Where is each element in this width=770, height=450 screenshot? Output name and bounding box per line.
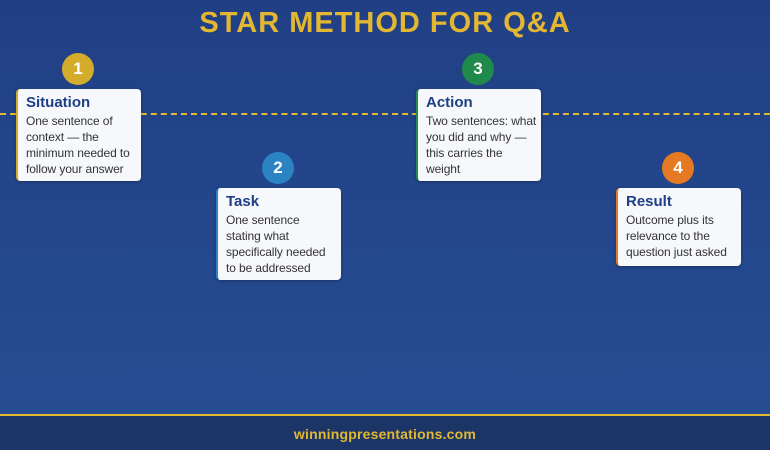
card: task <box>216 188 341 280</box>
card: action <box>416 89 541 181</box>
card: situation: Situation <box>26 94 90 111</box>
icon: step 4 circle <box>662 152 694 184</box>
card: action: Action <box>426 94 473 111</box>
icon: step 3 circle <box>462 53 494 85</box>
card: result <box>616 188 741 266</box>
icon: step 3 circle: 3 <box>473 59 483 78</box>
footer: winningpresentations.com <box>294 426 476 442</box>
card: action: Two sentences: what you did and why — this carries the weight <box>426 114 536 176</box>
icon: step 1 circle: 1 <box>73 59 83 78</box>
card: task: One sentence stating what specifically needed to be addressed <box>226 213 326 275</box>
icon: step 2 circle <box>262 152 294 184</box>
card: result: Outcome plus its relevance to the question just asked <box>626 213 727 259</box>
icon: step 1 circle <box>62 53 94 85</box>
icon: step 2 circle: 2 <box>273 158 283 177</box>
footer <box>0 414 770 450</box>
timeline dashed line <box>0 113 770 115</box>
card: situation <box>16 89 141 181</box>
title: STAR METHOD FOR Q&A <box>199 7 571 39</box>
card: situation: One sentence of context — the minimum needed to follow your answer <box>26 114 130 176</box>
card: task: Task <box>226 193 259 210</box>
card: result: Result <box>626 193 672 210</box>
icon: step 4 circle: 4 <box>673 158 683 177</box>
